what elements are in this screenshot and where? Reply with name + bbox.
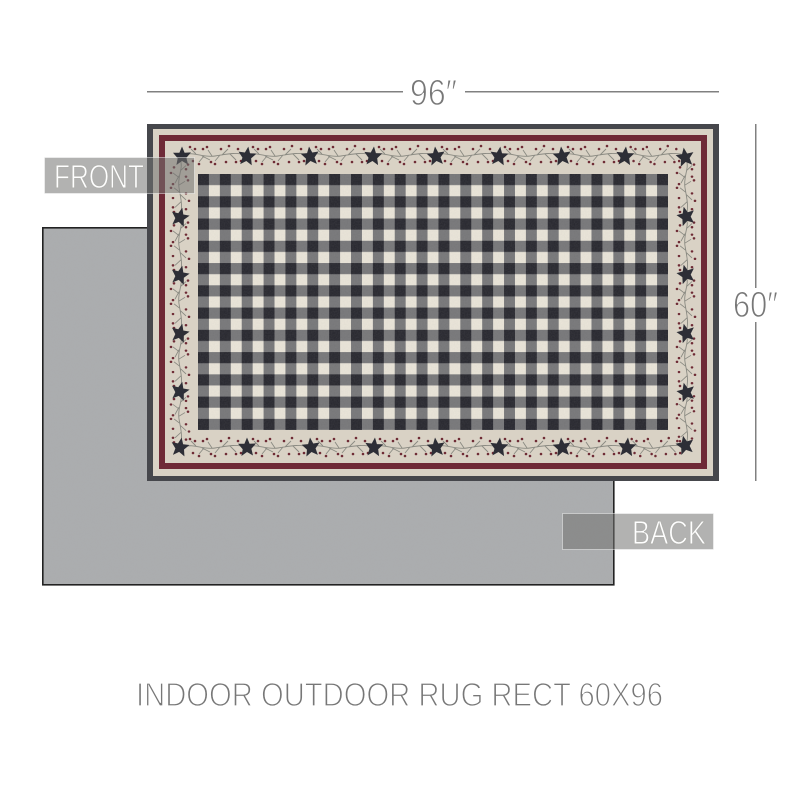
label: BACK: BACK: [632, 514, 706, 551]
gingham plaid field: [198, 174, 668, 430]
title: INDOOR OUTDOOR RUG RECT 60X96: [136, 676, 663, 713]
panel: front of rug: [147, 124, 719, 481]
width dimension: 96 inches: 96″: [410, 72, 457, 113]
label: FRONT: FRONT: [54, 158, 144, 195]
label: BACK: [562, 514, 714, 551]
panel: back of rug: [43, 228, 614, 585]
border vines with berries: [170, 145, 696, 457]
border stars: [169, 145, 697, 457]
height dimension: 60 inches: 60″: [733, 284, 778, 325]
